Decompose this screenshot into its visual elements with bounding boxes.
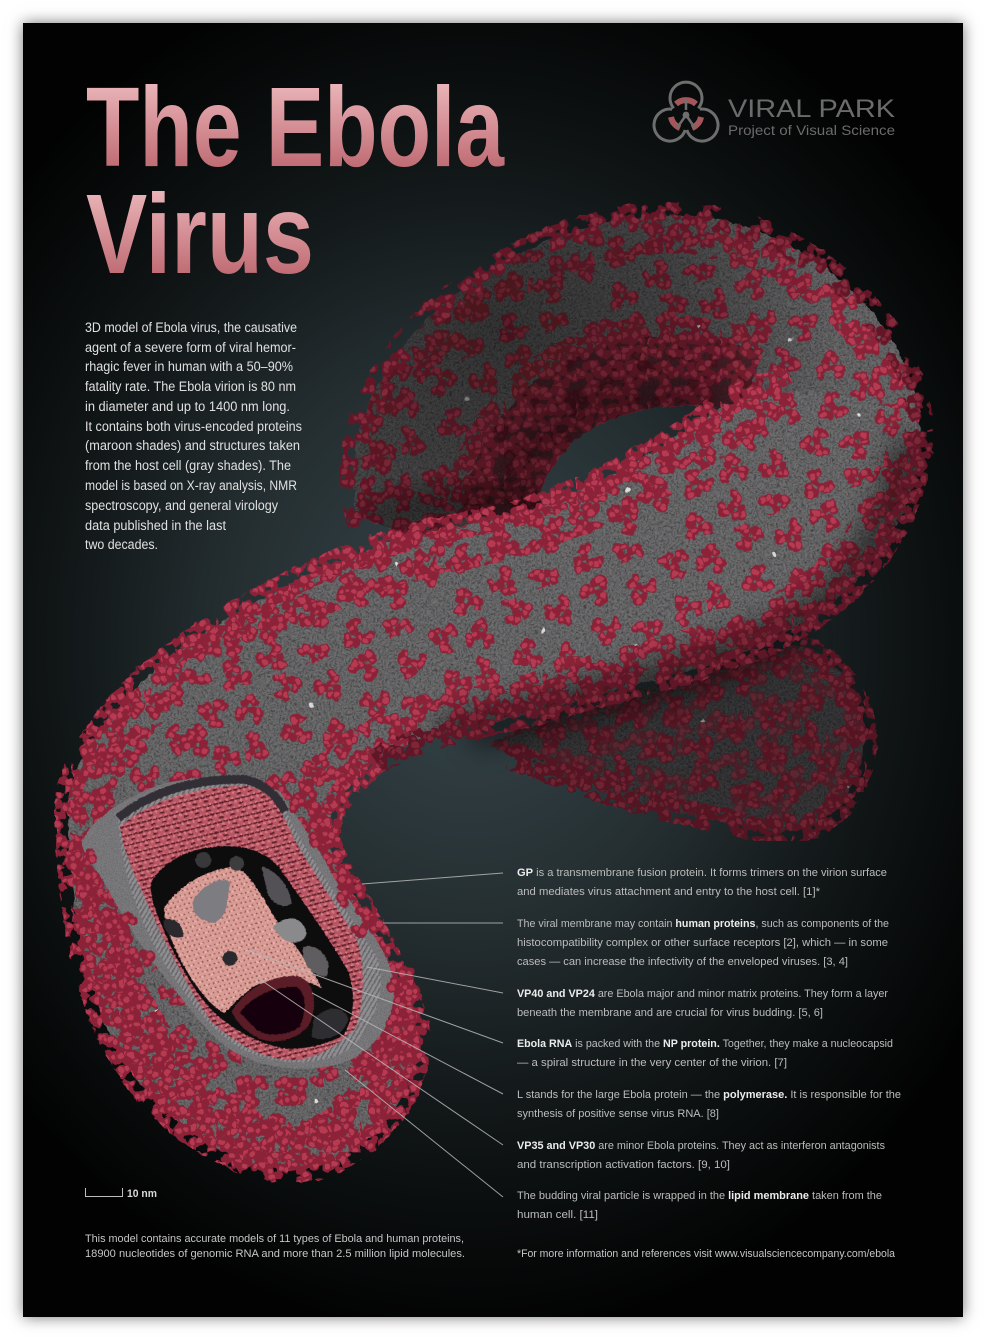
annotation: VP35 and VP30 [517,1140,885,1171]
annotation: VP40 and VP24: beneath the membrane and are crucial for virus budding. [5, 6] [517,1007,823,1019]
intro text [85,320,302,552]
RNA nucleocapsid [164,867,322,1013]
intro text: It contains both virus-encoded proteins [85,419,302,434]
annotation: GP [517,867,887,898]
annotation: human proteins: cases — can increase the infectivity of the enveloped viruses. [3, 4] [517,956,848,968]
dark interior cavity [151,846,353,1049]
annotation: VP35 and VP30: VP35 and VP30 are minor Ebola proteins. They act as interferon antagonists [517,1140,885,1152]
footnote: model contents [85,1233,465,1260]
intro text: fatality rate. The Ebola virion is 80 nm [85,379,296,394]
annotation: GP: GP is a transmembrane fusion protein. It forms trimers on the virion surface [517,867,887,879]
coil surface [338,202,934,536]
footnote: model contents: 18900 nucleotides of genomic RNA and more than 2.5 million lipid molecules. [85,1248,465,1260]
annotation: lipid membrane: human cell. [11] [517,1209,598,1221]
leader lines [247,873,503,1197]
nucleocapsid open end [232,976,314,1041]
coil shading [353,215,920,616]
intro text: agent of a severe form of viral hemor- [85,340,296,355]
footnote: model contents: This model contains accurate models of 11 types of Ebola and human proteins, [85,1233,464,1245]
main tube body [68,378,920,1170]
annotation: lipid membrane: The budding viral particle is wrapped in the lipid membrane taken from the [517,1190,882,1202]
annotation: human proteins: histocompatibility complex or other surface receptors [2], which — in some [517,937,888,949]
coil rim trimers [353,215,920,536]
annotation: L polymerase [517,1089,901,1120]
intro text: from the host cell (gray shades). The [85,458,291,473]
coil inner wall above hole [500,376,750,520]
intro text: (maroon shades) and structures taken [85,438,300,453]
intro text: rhagic fever in human with a 50–90% [85,359,293,374]
far tube segment, lower right [490,645,865,831]
inner membrane bilayer edge [118,780,381,1062]
far tube shadow under main body [470,625,800,732]
title: The Ebola [86,64,505,190]
intro text: two decades. [85,537,158,552]
annotation: L polymerase: synthesis of positive sense virus RNA. [8] [517,1108,719,1120]
L and VP protein blobs [163,852,348,1039]
body shading [440,440,915,740]
icon: biohazard [654,82,718,141]
annotation: Ebola RNA: Ebola RNA is packed with the NP protein. Together, they make a nucleocapsid [517,1038,893,1050]
annotation: human proteins [517,918,889,968]
intro text: 3D model of Ebola virus, the causative [85,320,297,335]
annotation: human proteins: The viral membrane may contain human proteins, such as components of the [517,918,889,930]
footnote: references: *For more information and references visit www.visualsciencecompany.com/ebola [517,1248,896,1260]
annotation: VP40 and VP24 [517,988,888,1019]
VP40 matrix layer [120,786,363,1060]
dark membrane arc at top of cut [118,779,285,818]
title [86,64,505,297]
annotation: Ebola RNA [517,1038,893,1069]
looped upper coil [338,202,934,536]
logo name: VIRAL PARK [728,95,895,123]
annotation: Ebola RNA: — a spiral structure in the very center of the virion. [7] [517,1057,787,1069]
logo: Viral Park [654,82,895,141]
annotation: lipid membrane [517,1190,882,1221]
illustration: Ebola virion 3D model [63,215,920,1170]
annotation: VP40 and VP24: VP40 and VP24 are Ebola major and minor matrix proteins. They form a layer [517,988,888,1000]
annotation: GP: and mediates virus attachment and entry to the host cell. [1]* [517,886,821,898]
intro text: in diameter and up to 1400 nm long. [85,399,290,414]
tube rim trimers [68,378,790,1170]
coil occlusion under tube and around hole [360,396,730,520]
annotation: VP35 and VP30: and transcription activation factors. [9, 10] [517,1159,730,1171]
annotation: L polymerase: L stands for the large Ebola protein — the polymerase. It is responsible for the [517,1089,901,1101]
GP trimers overlapping the cut edge [63,720,427,1110]
cutaway section, scaled group [63,720,427,1110]
scale bar [86,1188,157,1200]
scale bar: 10 nm [127,1188,157,1200]
logo tagline: Project of Visual Science [728,123,895,138]
intro text: data published in the last [85,518,226,533]
viral membrane cross-section [82,777,394,1069]
title: Virus [86,171,314,297]
intro text: model is based on X-ray analysis, NMR [85,478,297,493]
intro text: spectroscopy, and general virology [85,498,278,513]
